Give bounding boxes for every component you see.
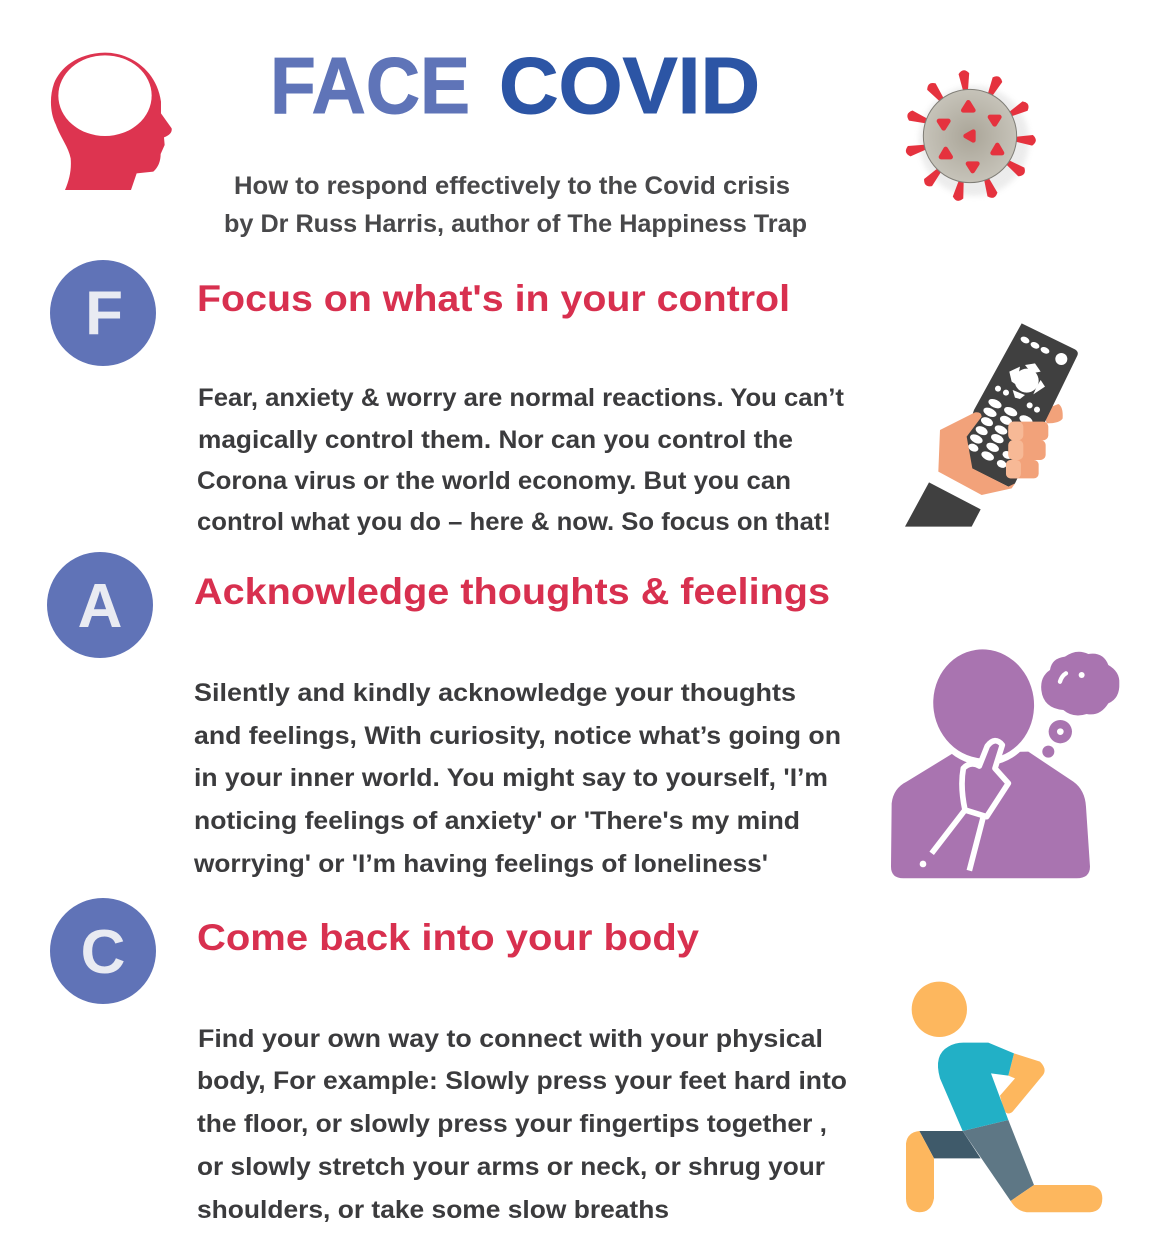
icon: person thinking: [891, 637, 1119, 878]
shoulders: [891, 752, 1090, 878]
fingertip: [1043, 404, 1063, 423]
text block: come back: the floor, or slowly press your fingertips together ,: [197, 1110, 827, 1138]
text block: focus: [197, 384, 845, 536]
title: COVID: [499, 41, 760, 130]
text block: acknowledge: in your inner world. You might say to yourself, 'I’m: [194, 764, 828, 792]
text block: come back: shoulders, or take some slow breaths: [197, 1196, 669, 1224]
text block: acknowledge: Silently and kindly acknowledge your thoughts: [194, 679, 796, 707]
heading: focus: Focus on what's in your control: [197, 278, 790, 319]
text block: focus: Corona virus or the world economy. But you can: [197, 467, 791, 495]
fingers: [1006, 422, 1048, 478]
palm and thumb: [938, 412, 1015, 495]
hand: [962, 741, 1008, 817]
title: [270, 41, 760, 130]
badge: C: C: [81, 918, 125, 987]
heading: come back: Come back into your body: [197, 917, 699, 958]
text block: acknowledge: [193, 679, 841, 878]
subtitle: [224, 172, 807, 238]
badge: C: [50, 898, 156, 1004]
sleeve: [905, 482, 981, 527]
text block: come back: [197, 1025, 847, 1224]
icon: head silhouette: [51, 53, 172, 190]
text block: come back: or slowly stretch your arms or neck, or shrug your: [197, 1153, 825, 1181]
thought bubble: [1041, 652, 1119, 715]
text block: acknowledge: and feelings, With curiosity, notice what’s going on: [194, 722, 841, 750]
badge: A: A: [78, 572, 122, 641]
heading: acknowledge: Acknowledge thoughts & feelings: [194, 571, 830, 612]
subtitle: How to respond effectively to the Covid crisis: [234, 172, 790, 200]
badge: F: [50, 260, 156, 366]
icon: hand holding remote: [905, 323, 1078, 527]
remote body: [965, 323, 1078, 487]
text block: acknowledge: worrying' or 'I’m having feelings of loneliness': [193, 850, 768, 878]
title: FACE: [270, 41, 470, 130]
subtitle: by Dr Russ Harris, author of The Happiness Trap: [224, 210, 807, 238]
head: [920, 637, 1047, 773]
badge: A: [47, 552, 153, 658]
text block: focus: Fear, anxiety & worry are normal reactions. You can’t: [198, 384, 845, 412]
text block: come back: body, For example: Slowly press your feet hard into: [197, 1067, 847, 1095]
text block: focus: magically control them. Nor can you control the: [198, 426, 793, 454]
icon: person stretching: [906, 982, 1102, 1212]
icon: virus: [905, 70, 1036, 202]
badge: F: F: [85, 279, 123, 348]
remote buttons: [967, 335, 1067, 469]
text block: acknowledge: noticing feelings of anxiety' or 'There's my mind: [194, 807, 800, 835]
text block: come back: Find your own way to connect with your physical: [198, 1025, 823, 1053]
text block: focus: control what you do – here & now. So focus on that!: [197, 508, 831, 536]
